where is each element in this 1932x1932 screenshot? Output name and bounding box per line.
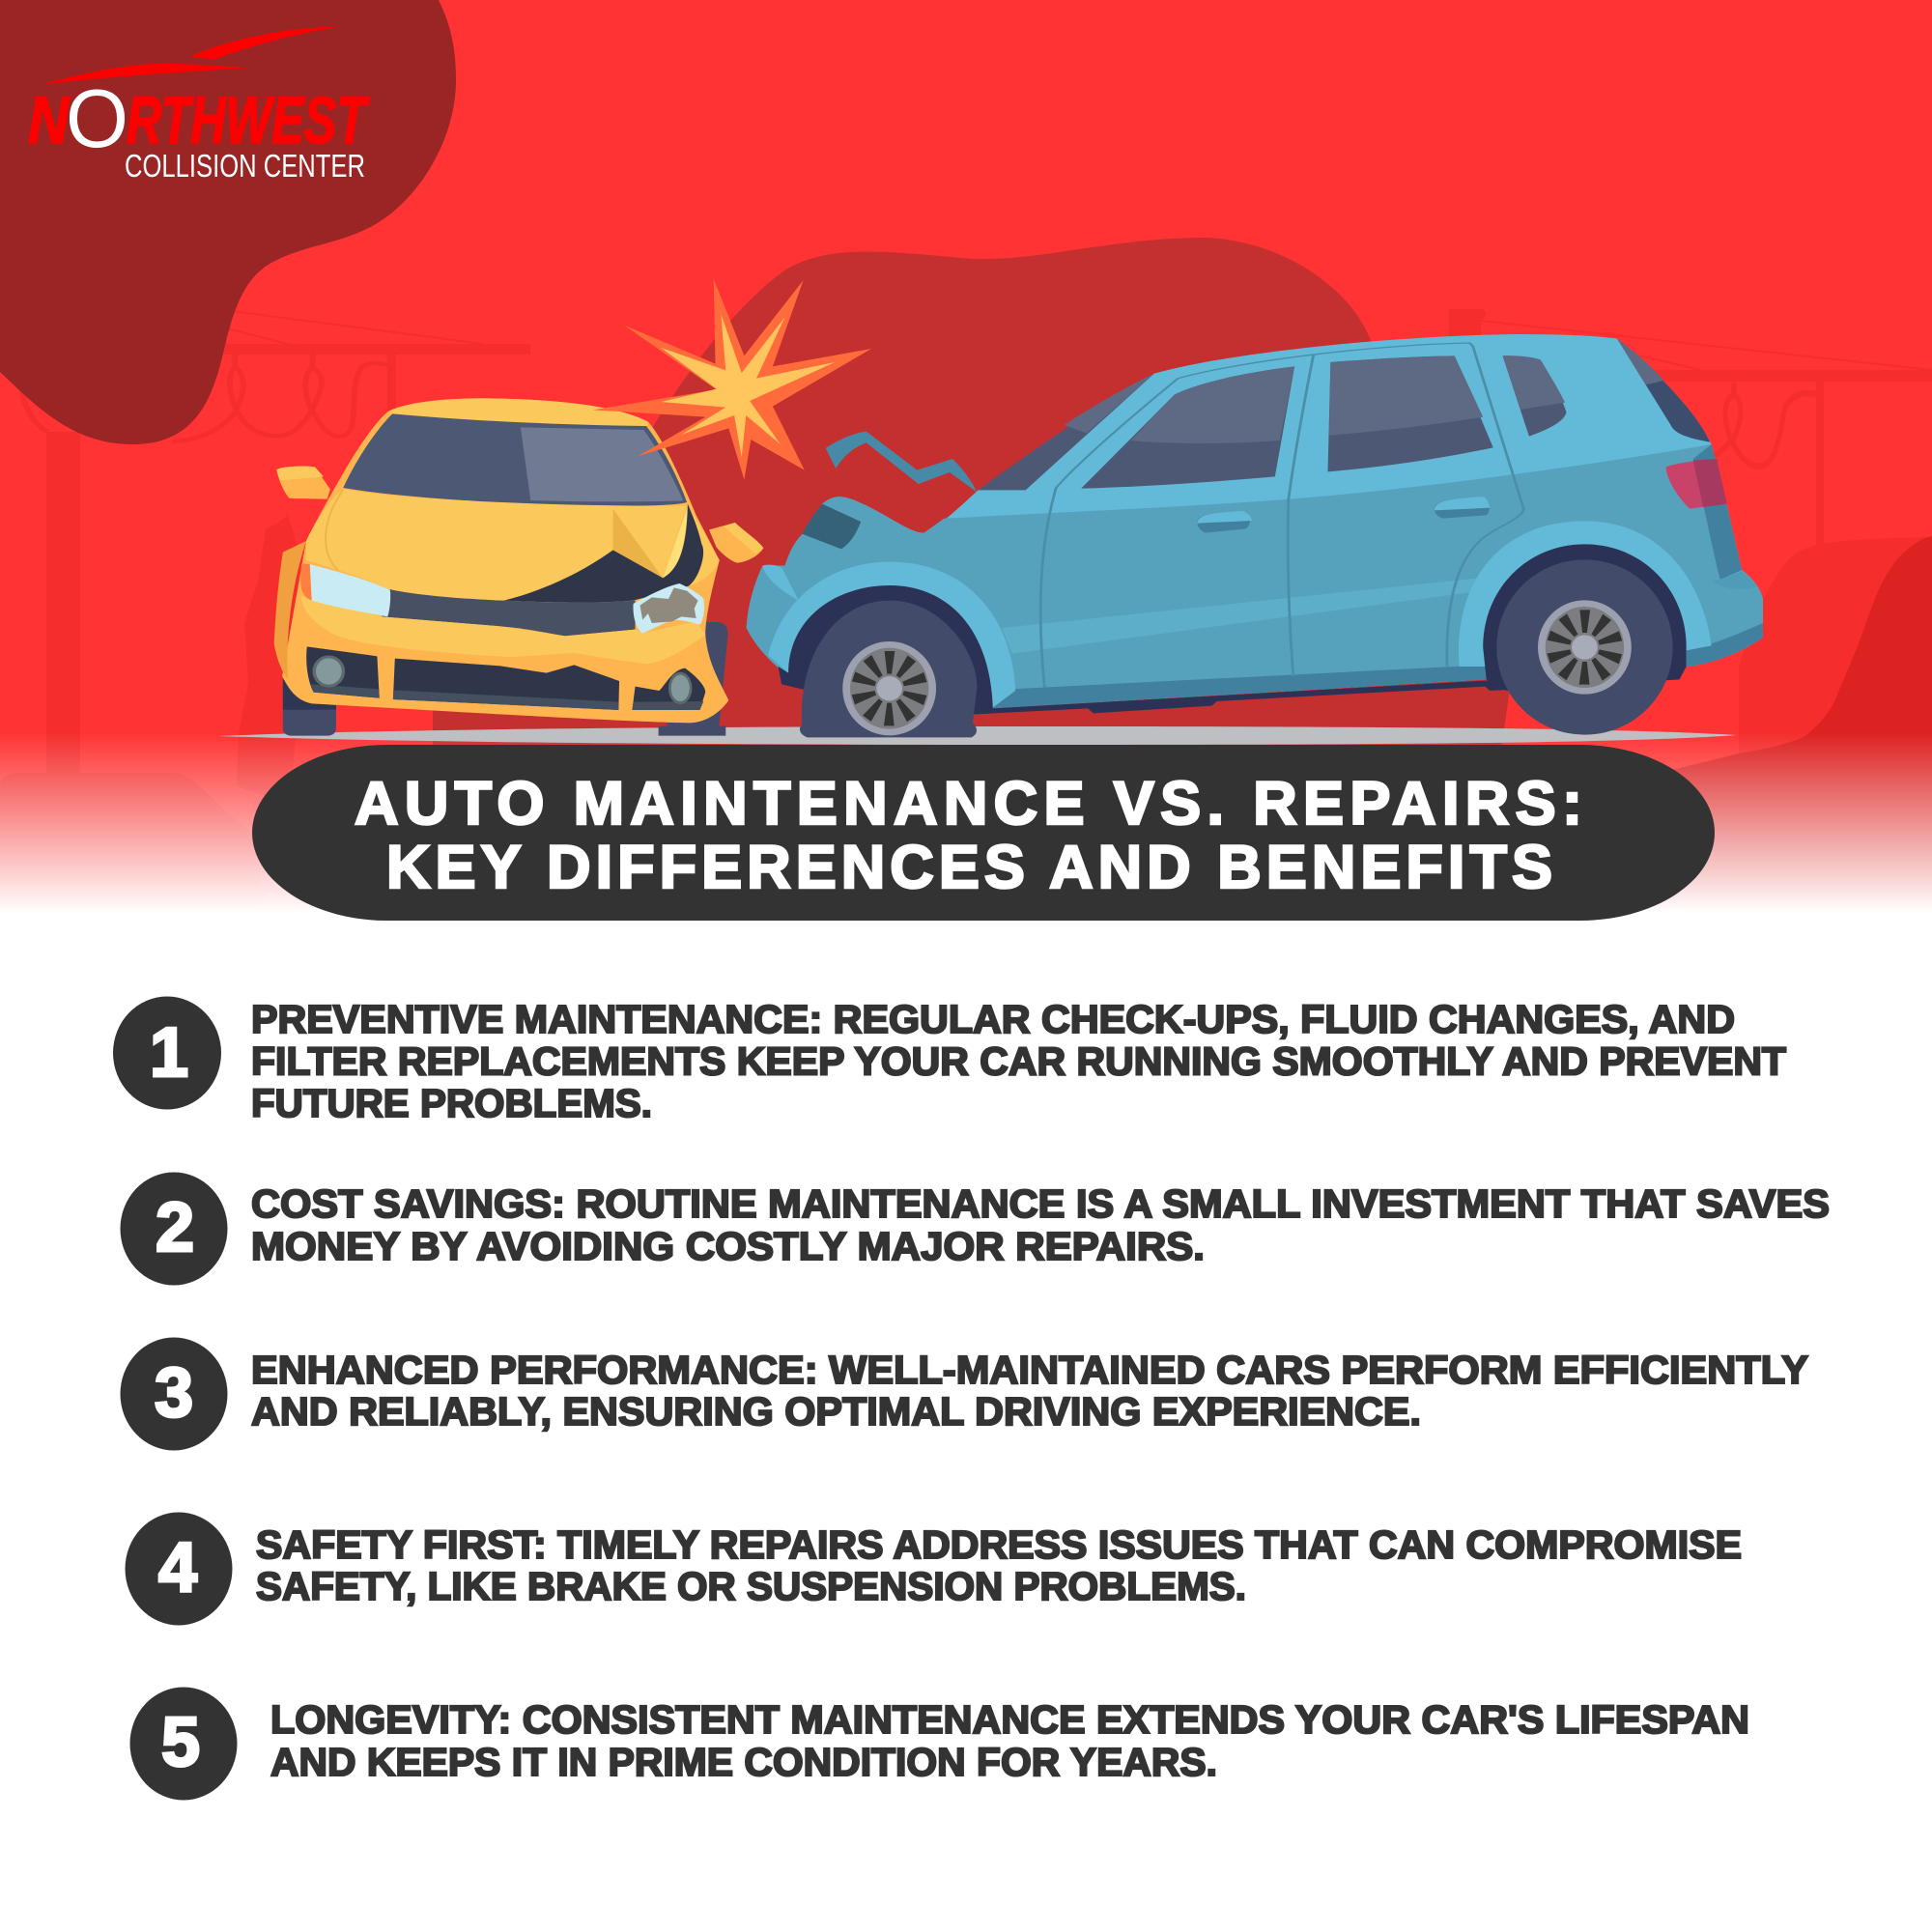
item 2 text: MONEY BY AVOIDING COSTLY MAJOR REPAIRS.	[251, 1224, 1205, 1268]
yellow car windshield	[343, 413, 687, 506]
yellow car grilles and fog lights	[306, 646, 705, 710]
yellow car body	[282, 398, 728, 723]
icon: impact star	[593, 278, 871, 480]
yellow car broken headlight	[633, 583, 704, 634]
dark red background blob behind the cars	[433, 238, 1516, 763]
logo wordmark: RTHWEST	[127, 83, 370, 157]
item 3 text	[251, 1348, 1808, 1434]
title text: AUTO MAINTENANCE VS. REPAIRS:	[355, 770, 1582, 838]
item 2	[120, 1173, 1830, 1285]
blue car headlight	[802, 504, 861, 549]
number badge 4: 4	[158, 1529, 197, 1606]
blue car upper body	[747, 334, 1763, 708]
number badge 5	[129, 1687, 238, 1801]
item 4 text: SAFETY, LIKE BRAKE OR SUSPENSION PROBLEMS.	[256, 1564, 1246, 1608]
yellow car mirrors	[276, 467, 763, 563]
number badge 1: 1	[150, 1014, 188, 1092]
blue car crumpled hood	[826, 432, 977, 492]
white fade under the header	[0, 732, 1932, 913]
logo white O ring: O	[66, 73, 128, 165]
item 2 text	[251, 1181, 1830, 1268]
blue car rear wheel	[1459, 521, 1712, 735]
blue car rear panels	[1687, 444, 1763, 667]
blue car front wheel	[768, 562, 1015, 737]
number badge 5: 5	[161, 1704, 200, 1781]
item 5 text: AND KEEPS IT IN PRIME CONDITION FOR YEARS.	[270, 1740, 1217, 1784]
blue car lower body	[747, 444, 1763, 708]
logo wordmark	[28, 83, 370, 157]
yellow car roof	[387, 398, 648, 428]
number badge 3: 3	[155, 1354, 193, 1432]
blue car tail light	[1666, 459, 1727, 509]
item 4 text	[256, 1522, 1742, 1608]
yellow car side panel	[274, 541, 306, 679]
ground shadow	[218, 726, 1737, 745]
title text: KEY DIFFERENCES AND BENEFITS	[386, 834, 1552, 901]
item 1 text	[251, 997, 1786, 1125]
blue car door handles	[1197, 497, 1490, 533]
illustration: yellow car	[274, 398, 763, 736]
item 1 text: FUTURE PROBLEMS.	[251, 1081, 652, 1125]
blue car windows	[979, 339, 1710, 490]
logo subtitle: COLLISION CENTER	[125, 148, 365, 184]
red header background	[0, 0, 1932, 913]
item 1 text: PREVENTIVE MAINTENANCE: REGULAR CHECK-UPS, FLUID CHANGES, AND	[251, 997, 1735, 1041]
item 4 text: SAFETY FIRST: TIMELY REPAIRS ADDRESS ISSUES THAT CAN COMPROMISE	[256, 1522, 1742, 1567]
logo: Northwest Collision Center	[28, 26, 370, 184]
number badge 4	[126, 1513, 232, 1625]
item 3 text: ENHANCED PERFORMANCE: WELL-MAINTAINED CARS PERFORM EFFICIENTLY	[251, 1348, 1808, 1392]
blue car door seams	[1040, 343, 1523, 688]
item 3 text: AND RELIABLY, ENSURING OPTIMAL DRIVING EXPERIENCE.	[251, 1389, 1421, 1434]
yellow car tires	[283, 622, 728, 736]
yellow car engine gap	[504, 504, 703, 603]
number badge 1	[113, 997, 221, 1109]
yellow car left headlight	[300, 563, 390, 616]
number badge 3	[120, 1337, 228, 1451]
item 5	[129, 1687, 1749, 1801]
logo panel blob	[0, 0, 456, 444]
item 5 text	[270, 1697, 1749, 1784]
item 1 text: FILTER REPLACEMENTS KEEP YOUR CAR RUNNING SMOOTHLY AND PREVENT	[251, 1039, 1786, 1084]
illustration: blue car	[747, 334, 1763, 737]
title text	[355, 770, 1582, 901]
item 5 text: LONGEVITY: CONSISTENT MAINTENANCE EXTENDS YOUR CAR'S LIFESPAN	[270, 1697, 1749, 1742]
yellow car bumper highlight	[300, 596, 705, 664]
blue car sill and underside	[975, 665, 1507, 714]
logo swoosh	[41, 26, 341, 85]
blue car body highlight stripe	[1002, 578, 1480, 654]
number badge 2: 2	[156, 1189, 194, 1266]
number badge 2	[120, 1173, 228, 1285]
yellow car bumper band	[382, 589, 636, 636]
logo wordmark: N	[28, 83, 71, 157]
item 2 text: COST SAVINGS: ROUTINE MAINTENANCE IS A SMALL INVESTMENT THAT SAVES	[251, 1181, 1830, 1226]
yellow car hood	[306, 490, 687, 601]
item 4	[126, 1513, 1742, 1625]
title pill	[252, 745, 1715, 921]
item 1	[113, 997, 1786, 1125]
faint garage silhouettes	[0, 309, 1932, 913]
item 3	[120, 1337, 1808, 1451]
